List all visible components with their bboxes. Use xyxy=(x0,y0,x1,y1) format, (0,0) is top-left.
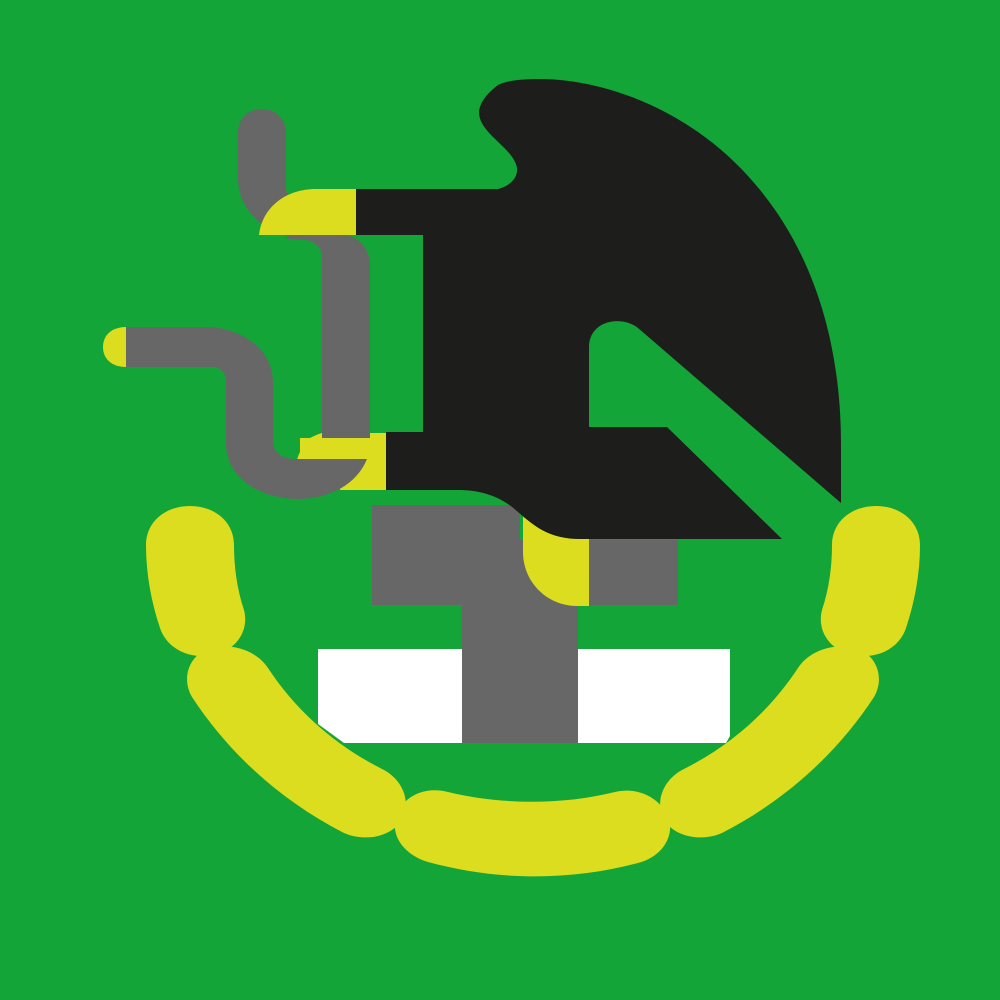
grey cactus pedestal xyxy=(372,505,678,743)
grey snake lower body xyxy=(126,327,367,499)
wreath segment: far right xyxy=(821,506,920,656)
yellow eagle claw under body xyxy=(523,515,589,606)
black eagle body xyxy=(356,79,841,539)
wreath segment: lower left xyxy=(187,646,406,837)
yellow eagle lower beak xyxy=(297,433,386,490)
yellow eagle head xyxy=(259,189,356,235)
wreath segment: lower right xyxy=(660,646,879,837)
upper grey snake tail xyxy=(238,109,330,240)
yellow snake tongue tip xyxy=(103,327,135,367)
wreath segment: far left xyxy=(146,506,245,656)
yellow wreath xyxy=(146,506,920,876)
wreath segment: bottom xyxy=(395,790,670,876)
white base block xyxy=(318,649,730,743)
grey vertical snake body xyxy=(285,235,370,438)
